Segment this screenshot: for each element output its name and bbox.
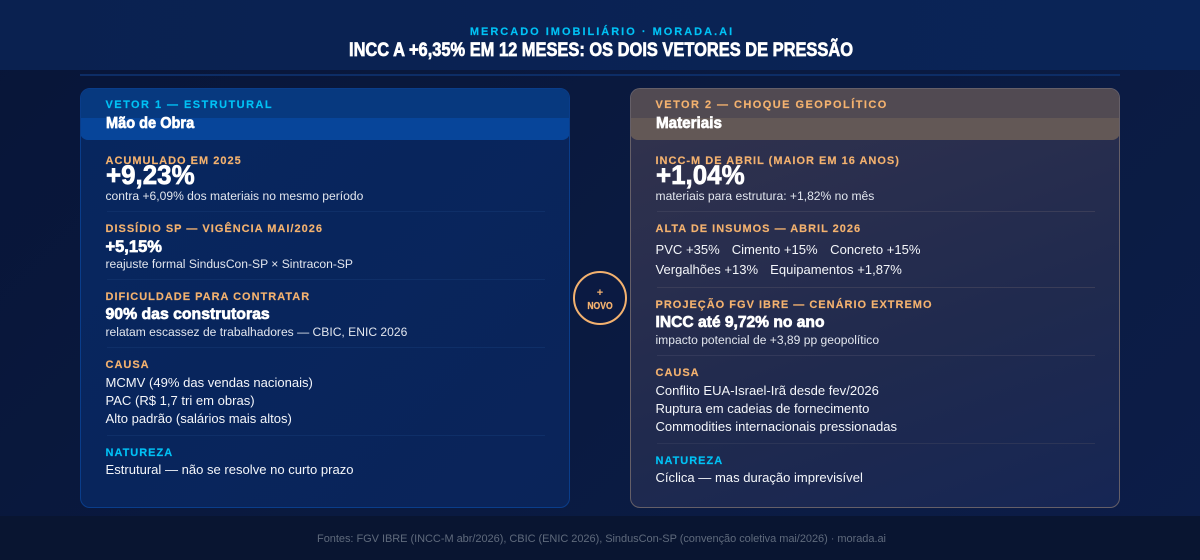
label: CAUSA bbox=[656, 366, 700, 378]
novo: NOVO bbox=[587, 300, 613, 312]
value: +5,15% bbox=[106, 238, 162, 256]
metric: acumulado em 2025 bbox=[106, 154, 363, 203]
vetor 1 label: VETOR 1 — ESTRUTURAL bbox=[106, 98, 273, 110]
vetor 2 label: VETOR 2 — CHOQUE GEOPOLÍTICO bbox=[656, 98, 888, 110]
metric: dificuldade para contratar bbox=[106, 290, 407, 339]
panel header: vetor 2 bbox=[630, 88, 1120, 140]
alta de insumos bbox=[656, 222, 920, 277]
label: NATUREZA bbox=[106, 446, 173, 458]
label: ALTA DE INSUMOS — ABRIL 2026 bbox=[656, 222, 861, 234]
natureza bbox=[106, 446, 354, 477]
note: relatam escassez de trabalhadores — CBIC, ENIC 2026 bbox=[106, 325, 407, 339]
metric: INCC-M de abril bbox=[656, 154, 900, 203]
insumos line 2: Vergalhões +13% Equipamentos +1,87% bbox=[656, 262, 902, 277]
panel: vetor 1 mão de obra bbox=[80, 88, 570, 508]
note: impacto potencial de +3,89 pp geopolítico bbox=[656, 333, 879, 347]
sources: Fontes: FGV IBRE (INCC-M abr/2026), CBIC (ENIC 2026), SindusCon-SP (convenção coletiva mai/2026) · morada.ai bbox=[317, 533, 886, 545]
label: DISSÍDIO SP — VIGÊNCIA MAI/2026 bbox=[106, 222, 323, 234]
label: DIFICULDADE PARA CONTRATAR bbox=[106, 290, 310, 302]
value: +9,23% bbox=[106, 160, 194, 190]
causes: MCMV (49% das vendas nacionais) bbox=[106, 375, 313, 390]
vetor 1 heading: Mão de Obra bbox=[106, 114, 194, 132]
projeção FGV IBRE bbox=[656, 298, 933, 347]
panel header: vetor 1 bbox=[80, 88, 570, 140]
text: Estrutural — não se resolve no curto prazo bbox=[106, 462, 354, 477]
eyebrow: MERCADO IMOBILIÁRIO · MORADA.AI bbox=[470, 26, 734, 38]
causes: PAC (R$ 1,7 tri em obras) bbox=[106, 393, 255, 408]
label: ACUMULADO EM 2025 bbox=[106, 154, 242, 166]
badge: + novo bbox=[573, 271, 627, 325]
causes bbox=[656, 383, 897, 434]
causes: Ruptura em cadeias de fornecimento bbox=[656, 401, 869, 416]
panel: vetor 2 materiais bbox=[630, 88, 1120, 508]
value: INCC até 9,72% no ano bbox=[656, 314, 824, 330]
header band bbox=[0, 0, 1200, 70]
label: INCC-M DE ABRIL (MAIOR EM 16 ANOS) bbox=[656, 154, 900, 166]
text: Cíclica — mas duração imprevisível bbox=[656, 470, 863, 485]
note: contra +6,09% dos materiais no mesmo período bbox=[106, 189, 363, 203]
causa list bbox=[106, 358, 313, 426]
causa list bbox=[656, 366, 897, 434]
title: INCC A +6,35% EM 12 MESES: OS DOIS VETORES DE PRESSÃO bbox=[349, 40, 853, 61]
value: +1,04% bbox=[656, 160, 744, 190]
causes: Alto padrão (salários mais altos) bbox=[106, 411, 292, 426]
footer bbox=[0, 516, 1200, 560]
note: materiais para estrutura: +1,82% no mês bbox=[656, 189, 874, 203]
header rule bbox=[80, 74, 1120, 76]
insumos line 1: PVC +35% Cimento +15% Concreto +15% bbox=[656, 242, 920, 257]
causes: Commodities internacionais pressionadas bbox=[656, 419, 897, 434]
label: CAUSA bbox=[106, 358, 150, 370]
label: PROJEÇÃO FGV IBRE — CENÁRIO EXTREMO bbox=[656, 298, 933, 310]
value: 90% das construtoras bbox=[106, 306, 270, 322]
vetor 2 heading: Materiais bbox=[656, 114, 721, 132]
natureza bbox=[656, 454, 863, 485]
causes: Conflito EUA-Israel-Irã desde fev/2026 bbox=[656, 383, 879, 398]
causes bbox=[106, 375, 313, 426]
note: reajuste formal SindusCon-SP × Sintracon-SP bbox=[106, 257, 353, 271]
metric: dissídio SP bbox=[106, 222, 353, 271]
label: NATUREZA bbox=[656, 454, 723, 466]
plus: + bbox=[597, 287, 603, 299]
